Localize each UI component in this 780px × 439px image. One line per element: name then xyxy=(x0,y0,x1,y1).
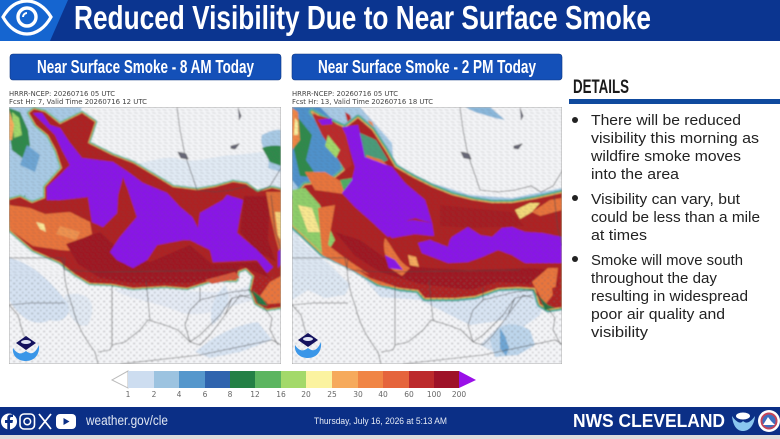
header banner xyxy=(0,0,780,41)
frame xyxy=(9,107,281,364)
model caption: 8 AM map: HRRR-NCEP: 20260716 05 UTC xyxy=(9,90,115,98)
orange fringe east xyxy=(266,192,281,258)
icon: NOAA logo, footer xyxy=(732,412,755,431)
subheading: 8 AM: Near Surface Smoke - 8 AM Today xyxy=(37,57,254,77)
NWS Cleveland wordmark: NWS CLEVELAND xyxy=(573,411,725,431)
colour scale legend: 40 xyxy=(378,390,388,399)
colour scale legend xyxy=(112,371,476,399)
detail bullet: visibility can vary: could be less than a mile xyxy=(591,210,760,226)
detail bullet: smoke moves south: poor air quality and xyxy=(591,307,725,323)
colour scale legend: 1 xyxy=(126,390,131,399)
icon: NWS logo, footer xyxy=(758,410,780,432)
frame xyxy=(292,107,562,364)
model caption: 2 PM map: HRRR-NCEP: 20260716 05 UTC xyxy=(292,90,398,98)
smoke band fill xyxy=(292,112,562,309)
map: smoke forecast 8 AM xyxy=(9,107,281,364)
detail bullet: smoke moves south: Smoke will move south xyxy=(591,253,743,269)
footer bar xyxy=(0,407,780,439)
detail bullet: reduced visibility xyxy=(572,113,759,183)
colour scale legend: 60 xyxy=(404,390,414,399)
upper left bands xyxy=(292,107,342,188)
barbs xyxy=(292,107,562,277)
colour scale legend: 12 xyxy=(250,390,260,399)
colour scale legend: 100 xyxy=(427,390,441,399)
detail bullet: smoke moves south: resulting in widespread xyxy=(591,289,748,305)
model caption: 8 AM map xyxy=(9,90,147,106)
website link: weather.gov/cle xyxy=(85,413,168,428)
colour scale legend: 20 xyxy=(301,390,311,399)
map: smoke forecast 2 PM xyxy=(292,107,564,364)
purple core xyxy=(33,113,273,273)
details heading: DETAILS xyxy=(573,77,629,98)
yellow inset, top right xyxy=(515,203,540,219)
orange patches xyxy=(384,238,410,276)
subheading: 2 PM xyxy=(292,54,562,80)
upper left bands xyxy=(9,108,30,160)
model caption: 2 PM map xyxy=(292,90,433,106)
detail bullet: smoke moves south: throughout the day xyxy=(591,271,718,287)
western orange and green xyxy=(292,187,336,254)
colour scale legend: 16 xyxy=(276,390,286,399)
subheading: 8 AM xyxy=(10,54,281,80)
detail bullet: reduced visibility: into the area xyxy=(591,167,680,183)
subheading: 2 PM: Near Surface Smoke - 2 PM Today xyxy=(318,57,536,77)
detail bullet: reduced visibility: wildfire smoke moves xyxy=(590,149,741,165)
details heading xyxy=(569,77,780,104)
colour scale legend: 2 xyxy=(152,390,157,399)
icon: NOAA logo, 8 AM map xyxy=(13,336,39,361)
barbs xyxy=(9,107,281,277)
smoke band edge xyxy=(9,109,281,309)
state lines xyxy=(9,107,281,364)
colour scale legend: 200 xyxy=(452,390,466,399)
smoke band fill xyxy=(9,109,281,309)
icon: NOAA logo, 2 PM map xyxy=(295,333,321,358)
detail bullet: visibility can vary xyxy=(572,192,760,244)
state lines xyxy=(292,107,564,364)
background pale smoke xyxy=(9,107,281,358)
model caption: 8 AM map: Fcst Hr: 7, Valid Time 20260716 12 UTC xyxy=(9,98,147,106)
detail bullet: smoke moves south: visibility xyxy=(591,325,649,341)
colour scale legend: 6 xyxy=(203,390,208,399)
dark red core xyxy=(66,232,270,283)
detail bullet: reduced visibility: There will be reduced xyxy=(591,113,741,129)
colour scale legend: 8 xyxy=(228,390,233,399)
timestamp: Thursday, July 16, 2026 at 5:13 AM xyxy=(314,416,447,427)
detail bullet: reduced visibility: visibility this morning as xyxy=(591,131,759,147)
orange southwest xyxy=(9,205,92,252)
header icon panel xyxy=(0,0,68,41)
detail bullet: smoke moves south xyxy=(572,253,748,341)
dark red core xyxy=(336,233,558,290)
icon: eye xyxy=(3,1,51,34)
background pale smoke xyxy=(292,107,562,357)
colour scale legend: 25 xyxy=(327,390,337,399)
colour scale legend: 30 xyxy=(353,390,363,399)
northern plume xyxy=(312,114,352,170)
model caption: 2 PM map: Fcst Hr: 13, Valid Time 20260716 18 UTC xyxy=(292,98,433,106)
colour scale legend: 4 xyxy=(177,390,182,399)
purple core xyxy=(342,125,432,237)
detail bullet: visibility can vary: at times xyxy=(591,228,647,244)
detail bullet: visibility can vary: Visibility can vary, but xyxy=(591,192,740,208)
smoke band edge xyxy=(292,112,562,309)
social media icons xyxy=(1,414,76,430)
